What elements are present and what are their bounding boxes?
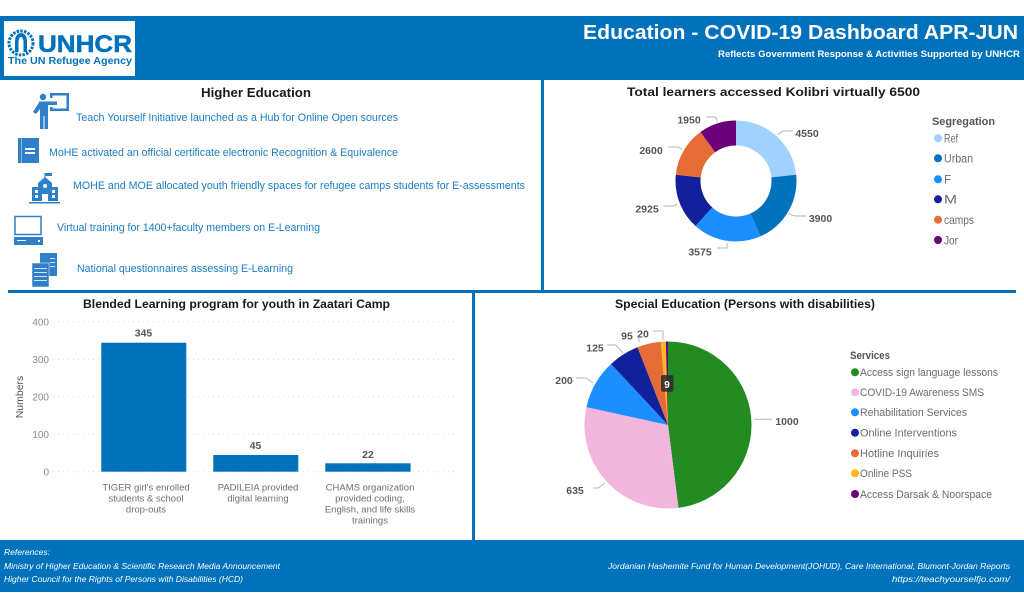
heading: blended learning: Blended Learning program for youth in Zaatari Camp: [83, 297, 390, 311]
icon: computer: [14, 216, 43, 245]
legend: services: Access Darsak & Noorspace: [860, 489, 992, 501]
legend: segregation: M: [944, 192, 957, 206]
pie data labels: 95: [621, 330, 633, 342]
bar chart: 45: [250, 440, 261, 452]
bar chart: CHAMS organization: [326, 482, 414, 494]
reference: johud: Jordanian Hashemite Fund for Human Development(JOHUD), Care International, Blumont-Jordan Reports: [607, 562, 1010, 571]
text: virtual training: Virtual training for 1400+faculty members on E-Learning: [57, 222, 320, 234]
bar chart: 0: [43, 468, 49, 478]
pie data labels: [555, 328, 799, 497]
legend: services: COVID-19 Awareness SMS: [860, 387, 984, 399]
UNHCR logo: UNHCR: [38, 31, 132, 58]
pie data labels: 200: [555, 375, 573, 387]
pie data labels: 125: [586, 342, 604, 354]
legend: segregation: Jor: [944, 234, 958, 248]
text: youth friendly spaces: MOHE and MOE allocated youth friendly spaces for refugee camps students for E-assessments: [73, 180, 525, 192]
pie chart: [626, 383, 710, 467]
legend: services: Online Interventions: [860, 428, 957, 440]
bar chart: TIGER girl's enrolled: [102, 482, 190, 494]
text: national questionnaires: National questionnaires assessing E-Learning: [77, 263, 293, 275]
legend: services: [850, 350, 998, 501]
UNHCR logo: The UN Refugee Agency: [8, 55, 132, 67]
subtitle: Reflects Government Response & Activities Supported by UNHCR: [718, 49, 1020, 60]
text: teach yourself: Teach Yourself Initiative launched as a Hub for Online Open sources: [76, 112, 398, 124]
donut data labels: [635, 114, 832, 258]
icon: school: [29, 173, 60, 204]
references: References:: [4, 548, 50, 557]
pie data labels: 635: [566, 485, 584, 497]
donut data labels: 3575: [688, 246, 712, 258]
title: Education - COVID-19 Dashboard APR-JUN: [583, 22, 1018, 44]
legend: segregation: [932, 116, 995, 248]
donut data labels: 2600: [639, 145, 663, 157]
legend: services: Rehabilitation Services: [860, 407, 967, 419]
bar chart: 100: [32, 430, 49, 441]
icon: book: [18, 138, 39, 163]
text: certificate recognition: MoHE activated an official certificate electronic Recognition & Equivalence: [49, 147, 398, 159]
legend: services: Access sign language lessons: [860, 367, 998, 379]
bar chart: 200: [32, 392, 49, 404]
legend: segregation: Ref: [944, 132, 958, 146]
legend: segregation: Segregation: [932, 116, 995, 128]
donut data labels: 2925: [635, 204, 659, 216]
bar chart: drop-outs: [126, 504, 166, 516]
bar chart: English, and life skills: [325, 504, 415, 516]
legend: segregation: camps: [944, 213, 974, 227]
bar chart: students & school: [108, 494, 184, 504]
bar chart: [14, 318, 457, 526]
panel: kolibri learners: [627, 85, 995, 258]
bar chart: 345: [135, 328, 152, 340]
footer: [0, 540, 1024, 592]
panel: blended learning: [14, 297, 457, 526]
legend: services: Services: [850, 350, 890, 362]
pie data labels: 1000: [775, 416, 799, 428]
heading: higher education: Higher Education: [201, 86, 311, 100]
icon: documents: [32, 253, 57, 287]
bar chart: provided coding,: [335, 494, 405, 504]
UNHCR logo: [4, 21, 135, 76]
bar chart: trainings: [352, 516, 388, 526]
bar chart: Numbers: [14, 376, 26, 418]
donut data labels: 4550: [795, 128, 819, 140]
pie data labels: 20: [637, 328, 649, 340]
panel: higher education: [14, 86, 525, 287]
legend: services: Hotline Inquiries: [860, 448, 940, 460]
header band: [0, 16, 1024, 80]
bar chart: digital learning: [227, 494, 289, 504]
legend: segregation: Urban: [944, 152, 973, 166]
bar chart: PADILEIA provided: [218, 482, 298, 494]
donut chart: [688, 133, 784, 229]
bar chart: 300: [32, 355, 49, 366]
icon: teacher at board: [33, 93, 69, 129]
legend: segregation: F: [944, 172, 951, 186]
reference: ministry: Ministry of Higher Education & Scientific Research Media Announcement: [4, 562, 281, 571]
bar chart: 22: [362, 449, 374, 461]
donut data labels: 1950: [677, 114, 701, 126]
legend: services: Online PSS: [860, 468, 912, 480]
heading: special education: Special Education (Persons with disabilities): [615, 297, 875, 311]
bar chart: 400: [32, 318, 49, 328]
pie data labels: 9: [664, 380, 670, 391]
reference: higher council: Higher Council for the Rights of Persons with Disabilities (HCD): [4, 575, 243, 584]
donut data labels: 3900: [809, 213, 832, 225]
panel dividers: [8, 80, 1016, 540]
panel: special education: [555, 297, 998, 501]
reference: url: https://teachyourselfjo.com/: [892, 575, 1011, 584]
heading: kolibri: Total learners accessed Kolibri virtually 6500: [627, 85, 920, 99]
